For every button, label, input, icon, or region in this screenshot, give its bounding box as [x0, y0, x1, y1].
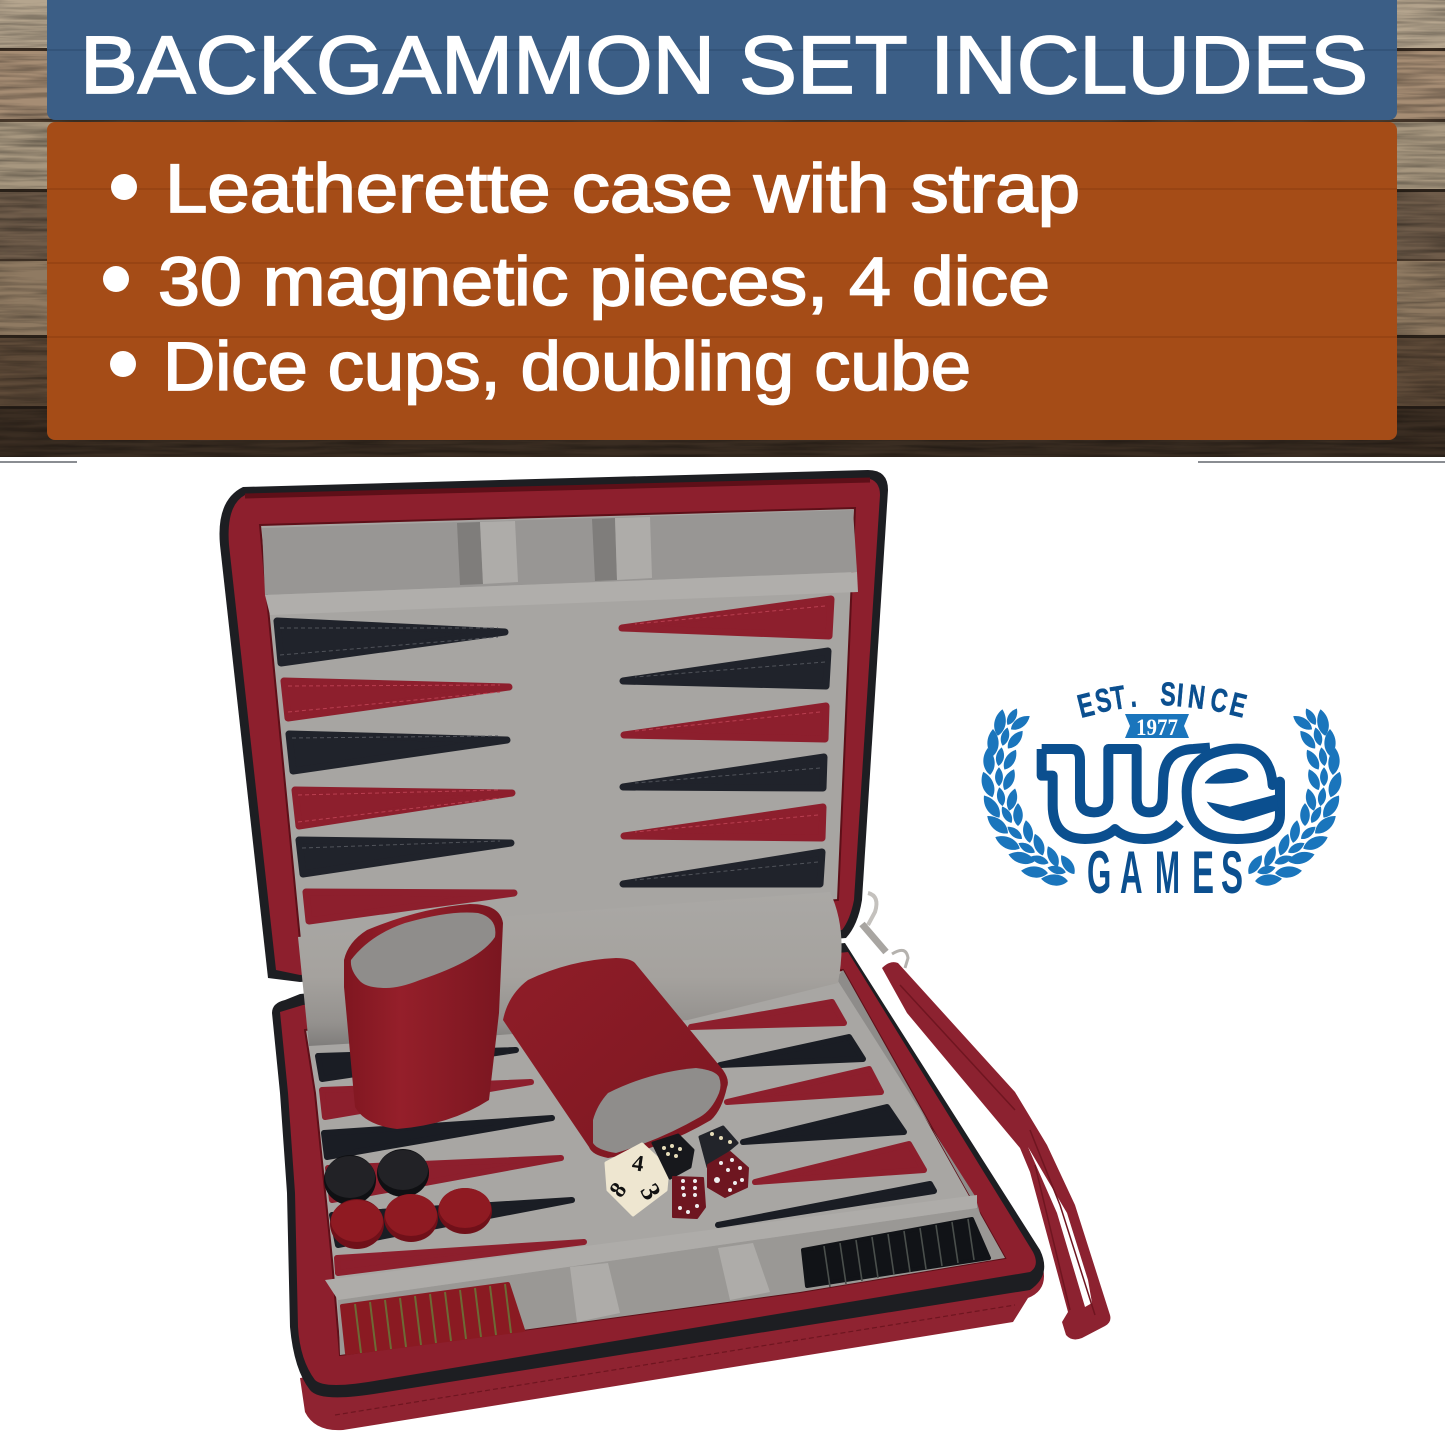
logo text: est. since: I [1175, 677, 1185, 715]
felt strip right [836, 970, 1003, 1255]
logo laurel wreath left [978, 707, 1078, 887]
list item: dice cups: Dice cups, doubling cube [163, 328, 971, 405]
logo text: est. since: . [1128, 678, 1138, 715]
white product area [0, 457, 1445, 1445]
logo text: games: E [1192, 840, 1214, 907]
logo: WE Games [978, 676, 1345, 907]
lid storage tray [262, 510, 858, 615]
logo text: games: A [1120, 840, 1143, 907]
logo text: est. since [1074, 676, 1250, 726]
black checker stack [803, 1219, 989, 1287]
lower storage tray [325, 1195, 1005, 1355]
list item: leatherette case: Leatherette case with strap [165, 150, 1080, 227]
lid points left [277, 621, 514, 921]
logo text: est. since: S [1160, 676, 1176, 714]
panel: contents list [47, 122, 1397, 440]
doubling cube: 8 [604, 1178, 631, 1202]
logo text: est. since: S [1092, 681, 1115, 721]
black dice [653, 1127, 737, 1178]
loose checkers [324, 1149, 492, 1249]
red checker stack [342, 1284, 523, 1353]
upright dice cup [344, 904, 503, 1129]
doubling cube: 4 [631, 1150, 646, 1176]
logo laurel wreath right [1245, 707, 1345, 887]
logo text: games: S [1221, 840, 1243, 907]
logo text: games: M [1155, 840, 1180, 907]
hinge [298, 892, 842, 1046]
strap and clasp [862, 893, 1110, 1339]
upper lid [219, 470, 888, 982]
list item: magnetic pieces: 30 magnetic pieces, 4 dice [158, 243, 1050, 320]
doubling cube [604, 1144, 668, 1215]
logo text: games: G [1087, 840, 1111, 907]
lower points right [691, 1002, 934, 1225]
logo ribbon: 1977: 1977 [1136, 715, 1178, 740]
logo text: est. since: T [1108, 679, 1129, 718]
logo text: est. since: C [1208, 681, 1230, 721]
lower tray [272, 892, 1044, 1430]
logo text: games [1087, 840, 1243, 907]
lid points right [622, 599, 831, 884]
lying dice cup [503, 958, 728, 1158]
logo ribbon: 1977 [1125, 714, 1189, 740]
product: open backgammon case [219, 470, 1110, 1430]
red dice [673, 1152, 748, 1218]
wood plank background [0, 0, 1445, 457]
logo wordmark: we [1042, 748, 1280, 839]
panel: title banner [47, 0, 1397, 120]
logo text: est. since: E [1074, 686, 1098, 726]
logo text: est. since: N [1186, 678, 1207, 717]
logo text: est. since: E [1226, 686, 1250, 726]
doubling cube: 3 [634, 1178, 667, 1205]
lower points left [318, 1050, 584, 1273]
heading: backgammon set includes: BACKGAMMON SET INCLUDES [80, 20, 1368, 111]
